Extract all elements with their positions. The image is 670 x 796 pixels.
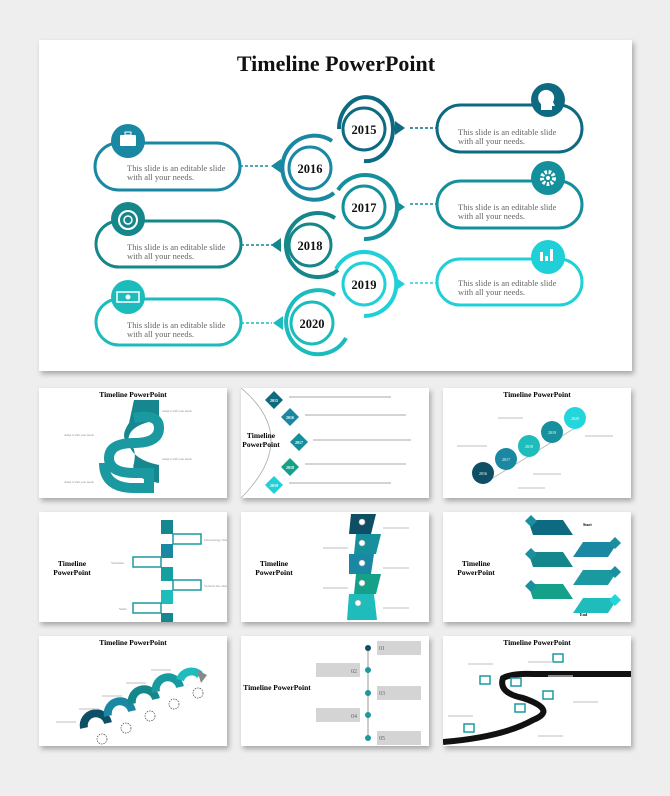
thumbnail 3: pins: 2019 [548,430,556,435]
thumbnail 2: diamonds: 2019 [270,483,278,488]
thumbnail 3: pins: 2018 [525,444,533,449]
right pill 2: with all your needs. [458,211,525,221]
thumbnail 2: diamonds: 2017 [295,440,303,445]
thumbnail 2: diamonds: 2018 [286,465,294,470]
thumbnail 5: zigzag blocks [241,512,429,622]
thumbnail 2: diamonds [241,388,429,498]
right pill 3: with all your needs. [458,287,525,297]
left pill 2 [96,202,272,267]
left pill 1: This slide is an editable slide [127,163,226,173]
year circles: 2018 [298,239,322,253]
thumbnail 1: ribbon steps: Timeline PowerPoint [99,390,167,399]
left pill 3: This slide is an editable slide [127,320,226,330]
thumbnail 1: ribbon steps: Adapt it with your needs [162,457,192,461]
thumbnail 8: vertical line boxes [241,636,429,746]
thumbnail 8: vertical line boxes: 03 [379,691,385,697]
thumbnail 4: vertical arrows [39,512,227,622]
main slide [39,40,632,371]
thumbnail 9: road [443,636,631,746]
thumbnail 4: vertical arrows: Static [119,607,127,611]
right pill 3 [410,240,582,305]
thumbnail 3: pins: Timeline PowerPoint [503,390,571,399]
thumbnail 3: pins: 2017 [502,457,510,462]
thumbnail 8: vertical line boxes: 01 [379,646,385,652]
thumbnail 8: vertical line boxes: Timeline PowerPoint [243,683,311,692]
thumbnail 7: arcs: Timeline PowerPoint [99,638,167,647]
right pill 1: with all your needs. [458,136,525,146]
year circles: 2016 [298,162,322,176]
left pill 3: with all your needs. [127,329,194,339]
right pill 3: This slide is an editable slide [458,278,557,288]
right pill 2 [410,161,582,228]
thumbnail 2: diamonds: 2015 [270,398,278,403]
left pill 2: This slide is an editable slide [127,242,226,252]
year circles [289,108,385,344]
title: Timeline PowerPoint [237,51,436,76]
thumbnail 1: ribbon steps: Adapt it with your needs [64,480,94,484]
thumbnail 3: pins: 2016 [479,471,487,476]
right pill 2: This slide is an editable slide [458,202,557,212]
left pill 1: with all your needs. [127,172,194,182]
thumbnail 4: vertical arrows: PowerPoint [53,568,91,577]
thumbnail 1: ribbon steps: Adapt it with your needs [162,409,192,413]
thumbnail 8: vertical line boxes: 05 [379,736,385,742]
thumbnail 1: ribbon steps [39,388,227,498]
year circles: 2020 [300,317,324,331]
thumbnail 6: chevrons: End [580,612,588,617]
thumbnail 6: chevrons [443,512,631,622]
thumbnail 7: arcs [39,636,227,746]
year circles: 2017 [352,201,376,215]
thumbnail 3: pins: 2020 [571,416,579,421]
thumbnail 5: zigzag blocks: Timeline [260,559,289,568]
thumbnail 3: pins [443,388,631,498]
ring pointers [271,121,405,330]
thumbnail 4: vertical arrows: Visualize [111,561,124,565]
year circles: 2019 [352,278,376,292]
thumbnail 6: chevrons: Timeline [462,559,491,568]
thumbnail 9: road: Timeline PowerPoint [503,638,571,647]
year circles: 2015 [352,123,376,137]
thumbnail 1: ribbon steps: Adapt it with your needs [64,433,94,437]
thumbnail 5: zigzag blocks: PowerPoint [255,568,293,577]
right pill 1 [410,83,582,152]
thumbnail 2: diamonds: 2016 [286,415,294,420]
left pill 3 [96,280,272,345]
left pill 2: with all your needs. [127,251,194,261]
thumbnail 6: chevrons: Start [583,522,592,527]
right pill 1: This slide is an editable slide [458,127,557,137]
year rings [282,97,397,354]
thumbnail 4: vertical arrows: Timeline [58,559,87,568]
thumbnail 6: chevrons: PowerPoint [457,568,495,577]
thumbnail 8: vertical line boxes: 04 [351,714,357,720]
thumbnail 2: diamonds: PowerPoint [242,440,280,449]
thumbnail 2: diamonds: Timeline [247,431,276,440]
thumbnail 8: vertical line boxes: 02 [351,669,357,675]
left pill 1 [95,124,270,190]
